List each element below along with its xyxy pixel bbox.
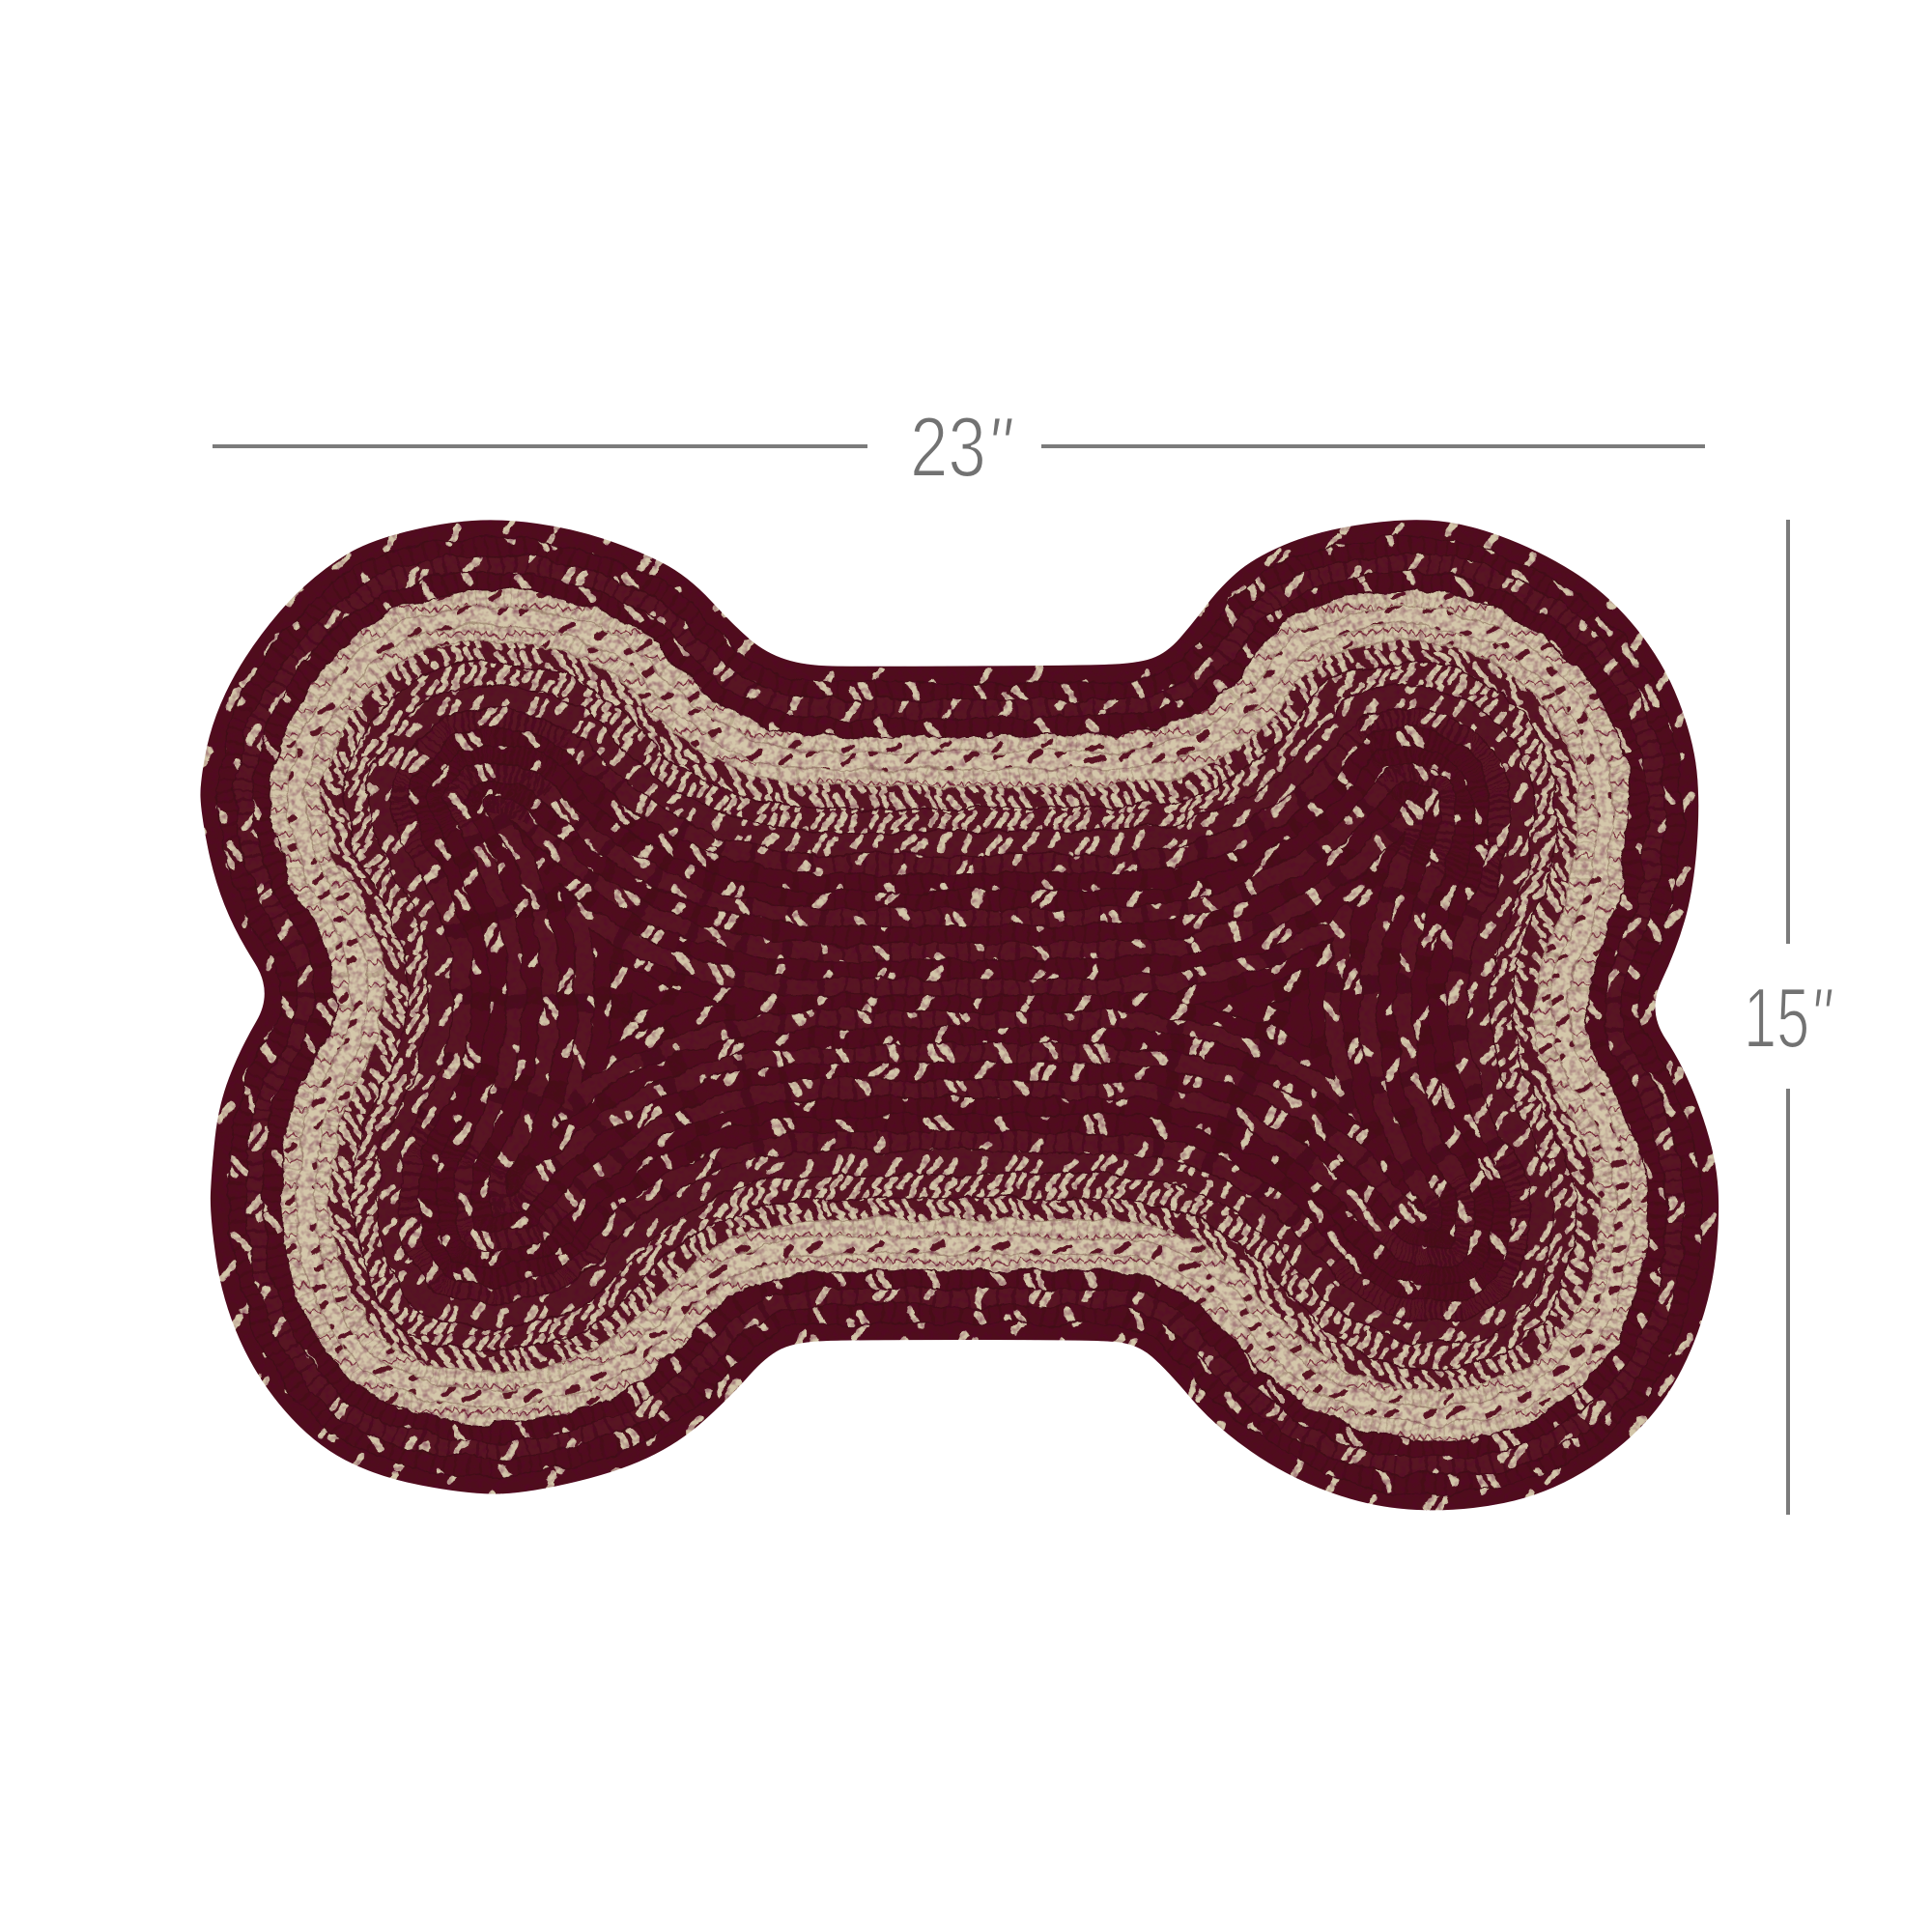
inner dark braid rings with sparse flecks	[390, 706, 1530, 1321]
bone-shaped braided rug	[184, 502, 1739, 1536]
height dimension: 15 inches	[1744, 520, 1833, 1515]
woven grain texture	[184, 502, 1739, 1536]
height line top	[1786, 520, 1790, 944]
width label: 23"	[910, 399, 1013, 495]
width line left	[213, 444, 867, 448]
height label: 15"	[1744, 970, 1833, 1065]
rug base	[630, 991, 1291, 1013]
mottled burgundy and cream rings	[319, 639, 1602, 1392]
width line right	[1041, 444, 1705, 448]
cream braid band	[269, 587, 1650, 1441]
height line bottom	[1786, 1089, 1790, 1515]
width dimension: 23 inches	[213, 399, 1705, 495]
outer burgundy border rings with flecks	[200, 520, 1719, 1510]
